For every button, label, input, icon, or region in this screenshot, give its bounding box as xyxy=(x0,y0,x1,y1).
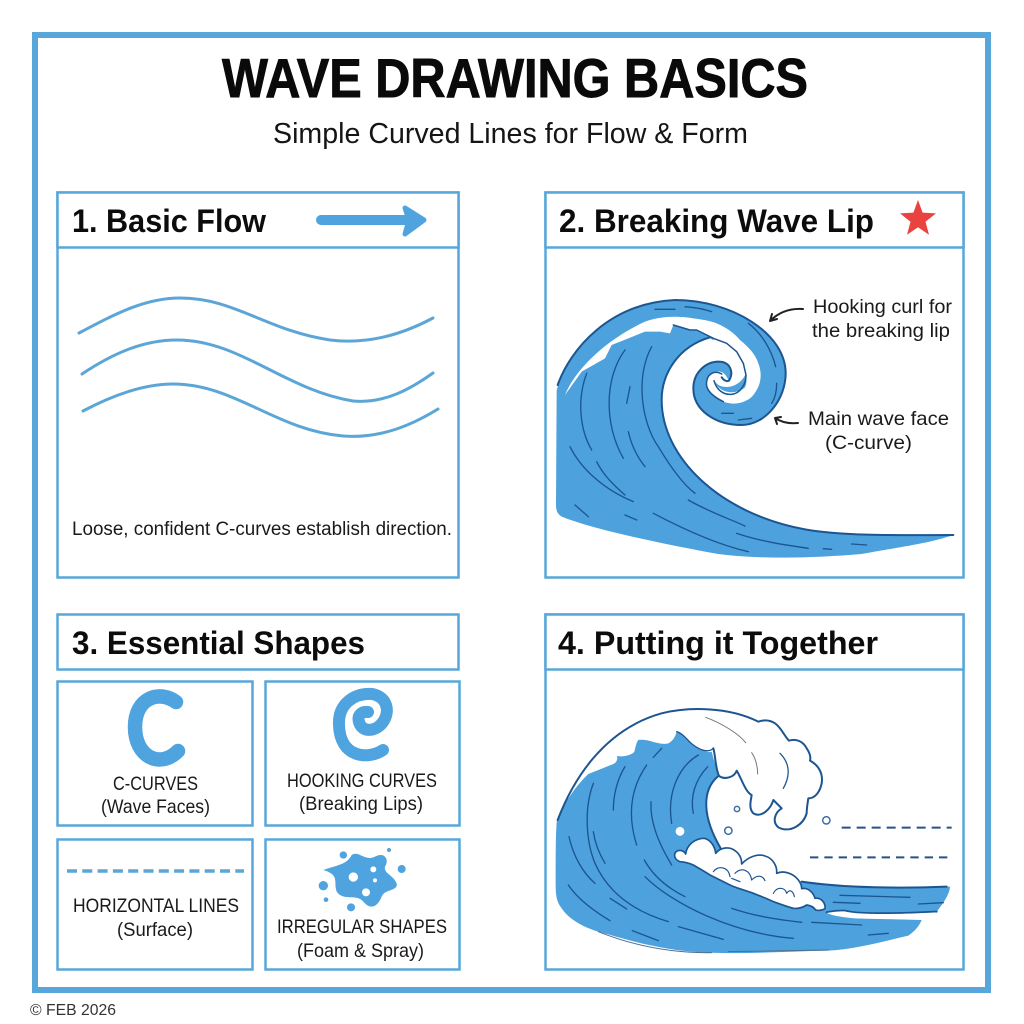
wave body xyxy=(556,300,953,558)
panel 3 header bar xyxy=(58,614,458,670)
panel: essential shapes xyxy=(58,614,460,970)
icon: C curve xyxy=(135,696,178,759)
panel: breaking wave lip xyxy=(546,192,964,578)
icon: flow arrow xyxy=(321,208,424,234)
icon: hook spiral xyxy=(339,694,387,755)
card: C-curves: C-CURVES xyxy=(113,773,198,795)
callout: hooking curl xyxy=(770,296,953,342)
illustration: curling wave xyxy=(556,300,953,558)
callout: main wave face: (C-curve) xyxy=(825,432,912,454)
card: irregular shapes: IRREGULAR SHAPES xyxy=(277,916,447,938)
icon: red star xyxy=(900,200,936,235)
wave interior strokes xyxy=(568,748,943,953)
wave interior lines xyxy=(570,307,867,552)
foam cloud xyxy=(675,838,825,910)
card: hooking curves xyxy=(266,682,460,826)
card: irregular shapes: (Foam & Spray) xyxy=(297,940,424,962)
panel 1 header bar xyxy=(58,192,458,248)
illustration: full wave xyxy=(556,709,952,953)
white streak xyxy=(827,911,937,920)
card: horizontal lines: (Surface) xyxy=(117,919,193,941)
caption: C-curves: Loose, confident C-curves establish direction. xyxy=(72,519,452,540)
icon: foam splat xyxy=(319,848,406,911)
subtitle: Simple Curved Lines for Flow & Form xyxy=(273,118,748,150)
heading: putting it together: 4. Putting it Together xyxy=(558,625,878,661)
callout: main wave face: Main wave face xyxy=(808,408,949,430)
panel: putting it together xyxy=(546,614,964,970)
icon: dashed surface line xyxy=(67,869,244,873)
card: C-curves xyxy=(58,682,252,826)
card: horizontal lines: HORIZONTAL LINES xyxy=(73,895,239,917)
spiral crescent xyxy=(715,374,746,392)
panel 2 header bar xyxy=(546,192,964,248)
flowing curved lines xyxy=(79,298,438,436)
white lip foam and swirl xyxy=(565,317,761,404)
callout: hooking curl: Hooking curl for xyxy=(813,296,953,318)
callout: main wave face xyxy=(775,408,949,454)
panel: basic flow xyxy=(58,192,458,578)
foam curl line xyxy=(780,753,788,788)
dashed surface lines xyxy=(810,828,952,857)
crest lines xyxy=(706,717,758,774)
heading: essential shapes: 3. Essential Shapes xyxy=(72,625,365,661)
wave dome and crest outlines xyxy=(558,709,947,913)
heading: basic flow: 1. Basic Flow xyxy=(72,203,266,239)
card: hooking curves: HOOKING CURVES xyxy=(287,770,437,792)
card: hooking curves: (Breaking Lips) xyxy=(299,793,423,815)
callout: hooking curl: the breaking lip xyxy=(812,320,950,342)
spray bubbles xyxy=(676,806,830,835)
title: WAVE DRAWING BASICS xyxy=(222,47,808,109)
wave outlines xyxy=(558,300,953,535)
copyright: © FEB 2026 xyxy=(30,1002,116,1019)
panel 4 header bar xyxy=(546,614,964,670)
card: C-curves: (Wave Faces) xyxy=(101,796,210,818)
card: horizontal lines xyxy=(58,840,252,970)
card: irregular shapes xyxy=(266,840,460,970)
heading: breaking wave lip: 2. Breaking Wave Lip xyxy=(559,203,874,239)
full wave body xyxy=(556,732,950,953)
foam details xyxy=(713,868,794,897)
